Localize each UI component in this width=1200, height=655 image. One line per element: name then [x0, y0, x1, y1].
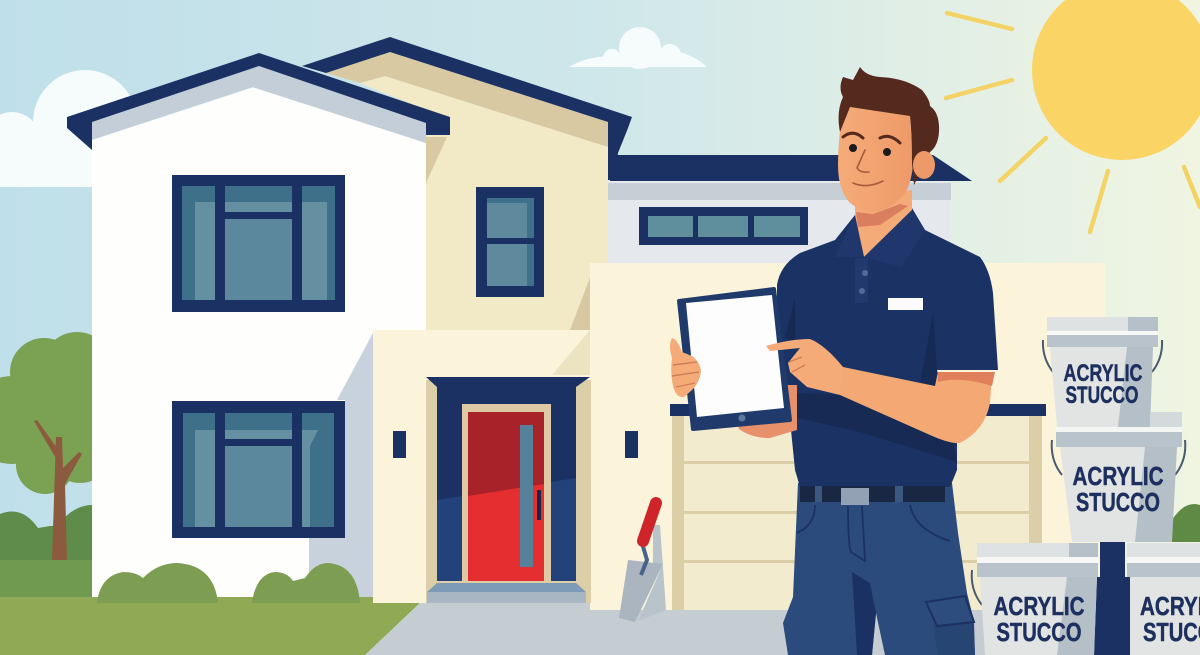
belt [800, 486, 945, 505]
bucket bottom left: STUCCO [996, 617, 1082, 647]
bucket middle: ACRYLIC [1072, 461, 1164, 491]
trowel [619, 503, 666, 622]
sun [946, 0, 1200, 232]
cargo pocket [926, 596, 975, 655]
driveway [365, 603, 1000, 655]
bucket bottom left: ACRYLIC [994, 591, 1085, 621]
pointing hand [766, 339, 843, 395]
ground lawn [0, 597, 425, 655]
front door [426, 377, 591, 603]
tree trunk [34, 420, 82, 560]
left white wing [67, 53, 450, 597]
collar [835, 210, 925, 267]
hair [839, 67, 939, 185]
window: upper middle [476, 187, 544, 297]
bucket top [1043, 317, 1162, 427]
right house wing [608, 155, 972, 266]
bucket top: STUCCO [1066, 382, 1138, 409]
window: lower left [172, 401, 345, 538]
ear [913, 151, 935, 179]
bucket middle [1052, 412, 1185, 542]
main cream gable [302, 37, 632, 340]
cloud left [0, 70, 137, 187]
wall shadow tan [426, 137, 447, 183]
bushes [97, 563, 360, 603]
name badge [888, 298, 923, 310]
head [838, 107, 913, 212]
bucket bottom right [1127, 543, 1200, 655]
face features [843, 133, 900, 143]
window: upper left [172, 175, 345, 312]
bucket top: ACRYLIC [1064, 360, 1142, 387]
background tree and bushes [0, 332, 1200, 598]
shirt [777, 208, 998, 487]
forearm and upper arm [835, 367, 992, 443]
garage door [670, 404, 1046, 610]
pants [783, 483, 975, 655]
navy gap [1094, 542, 1132, 655]
left arm behind tablet [738, 385, 797, 438]
bucket middle: STUCCO [1076, 487, 1160, 517]
cloud top [569, 27, 707, 69]
acrylic stucco buckets [972, 317, 1200, 655]
technician [670, 67, 998, 655]
wall lights [393, 431, 638, 458]
porch and garage walls [373, 263, 1106, 610]
tablet [679, 289, 790, 429]
neck [855, 190, 912, 257]
left hand [670, 338, 701, 397]
bucket bottom left [972, 543, 1098, 655]
